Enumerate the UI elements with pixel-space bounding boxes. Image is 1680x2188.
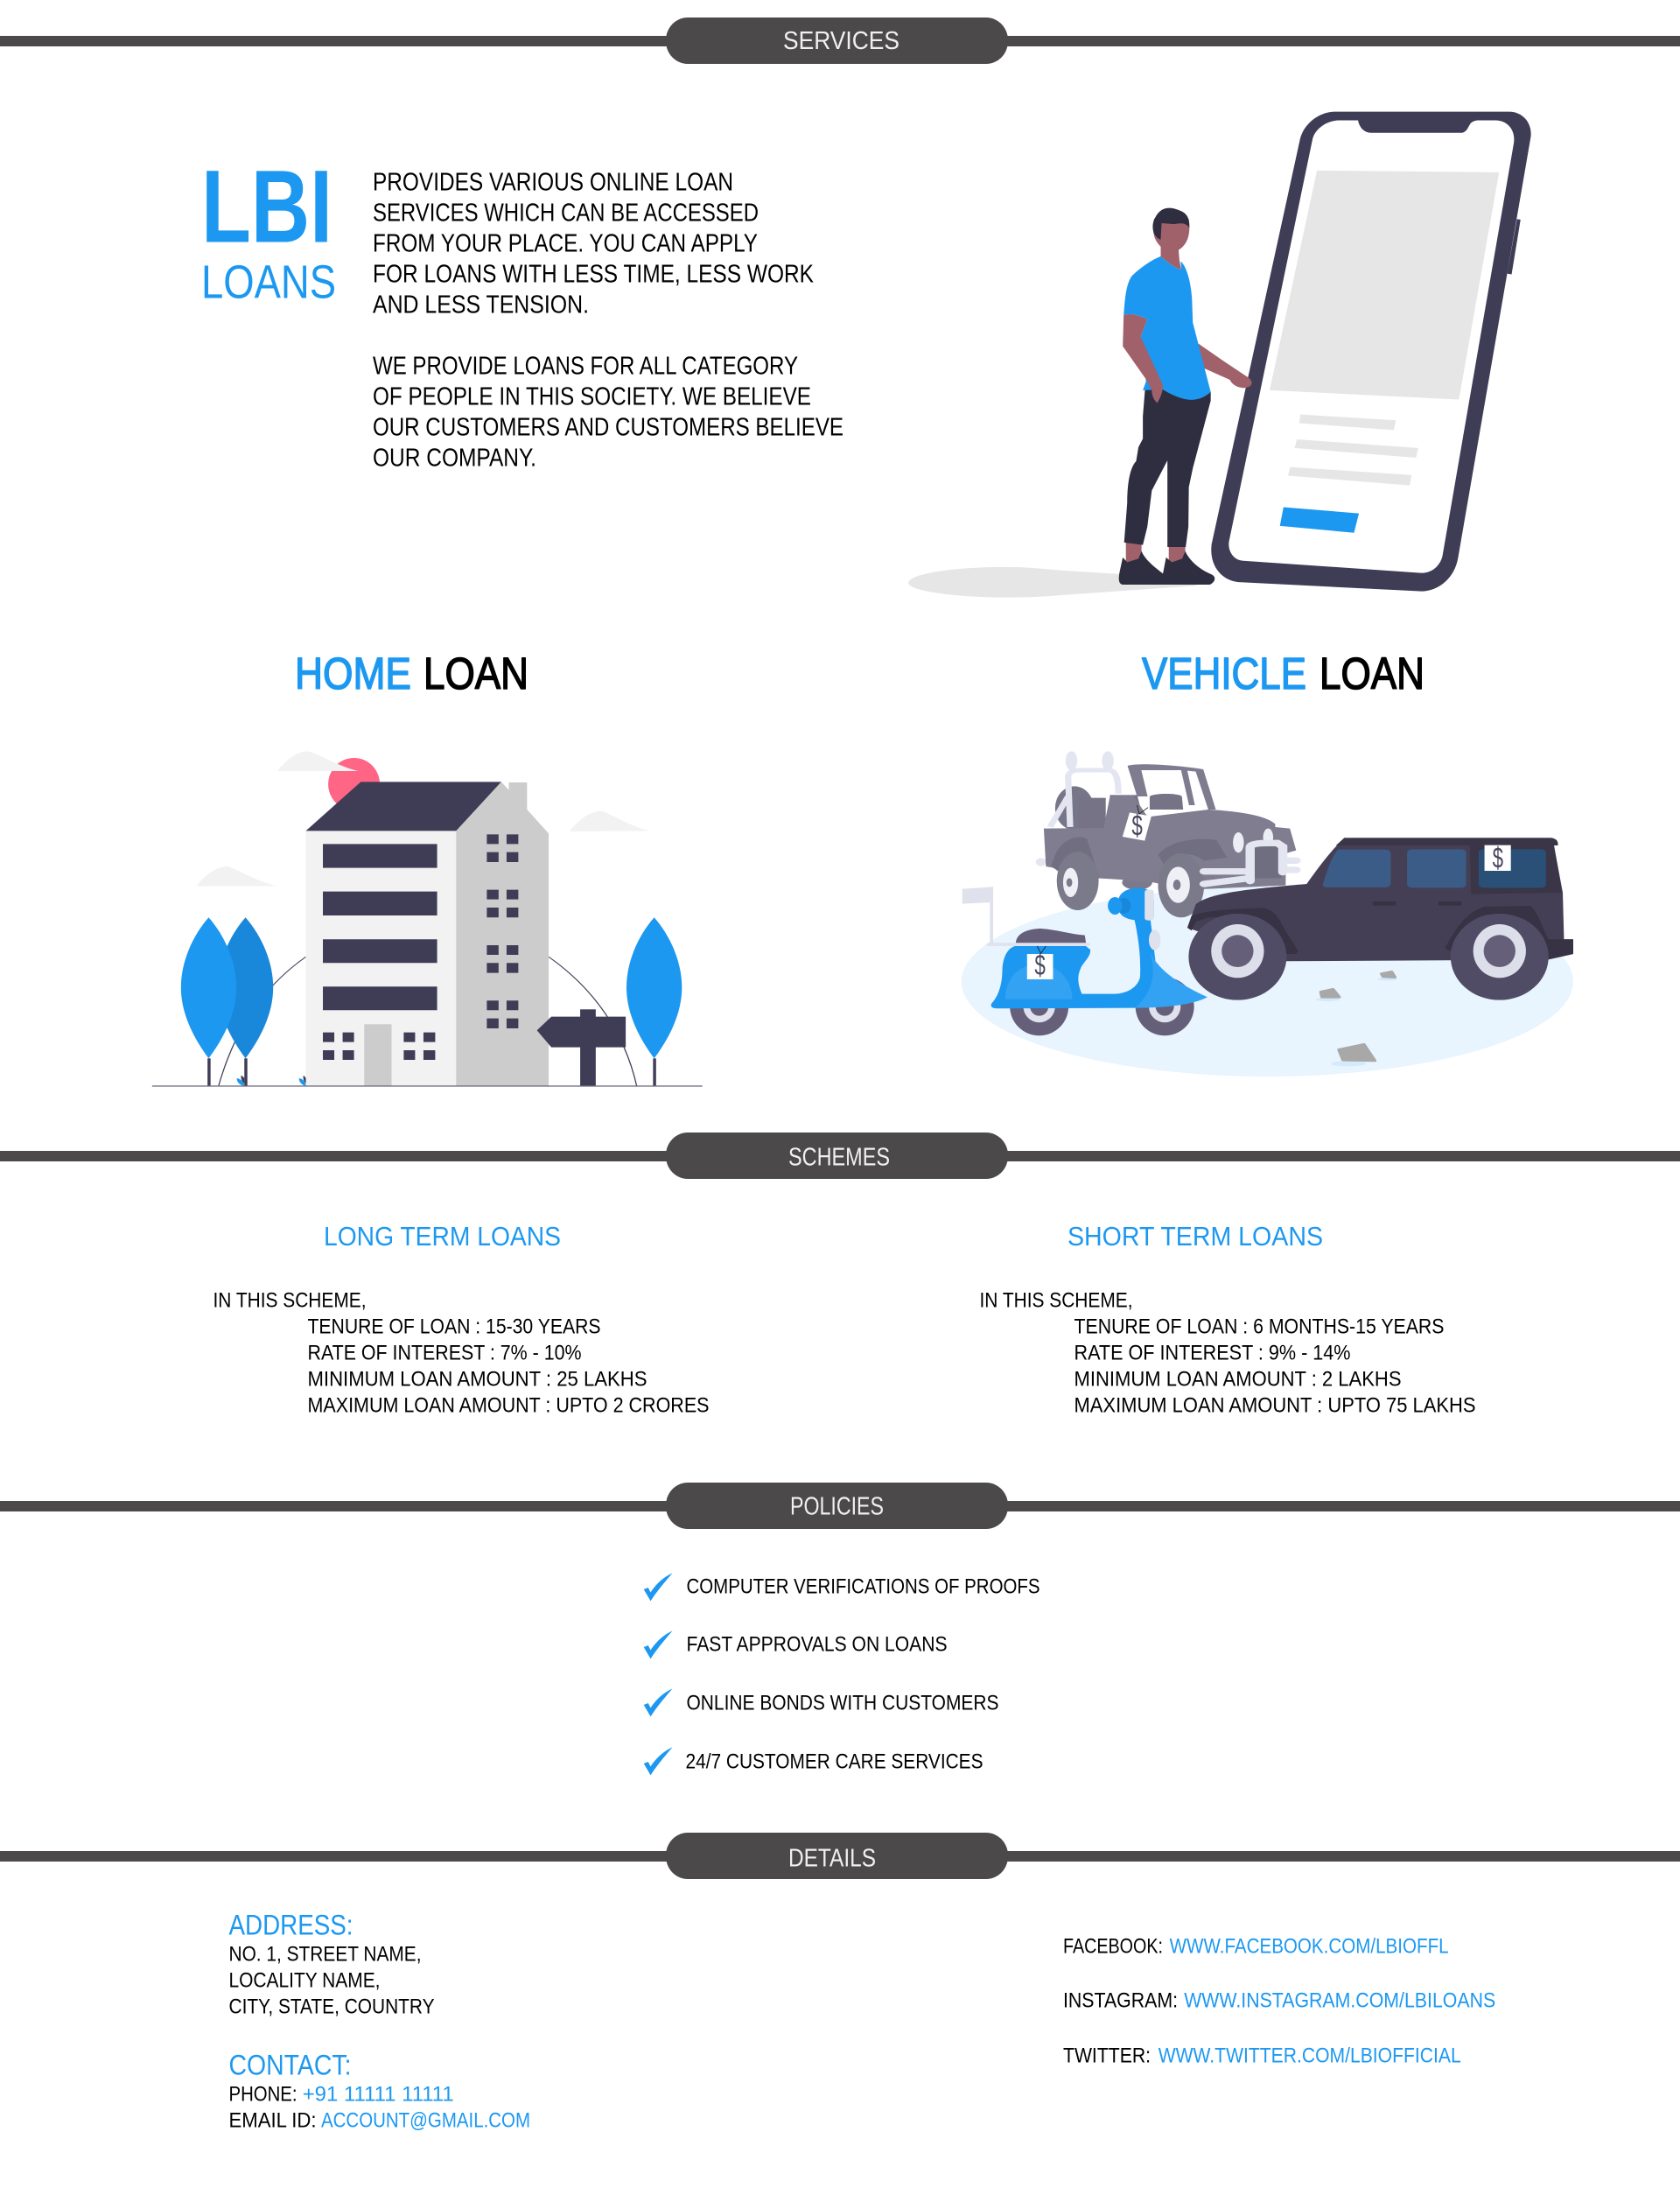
text block: address: LOCALITY NAME, xyxy=(229,1969,380,1993)
text block: short term loans: SHORT TERM LOANS xyxy=(1068,1221,1323,1252)
section header: policies xyxy=(0,1483,1680,1529)
icon: check mark 2 xyxy=(644,1630,673,1659)
list: policies checklist xyxy=(644,1573,1040,1775)
text block: company introduction xyxy=(373,169,844,473)
text block: long term loans: RATE OF INTEREST : 7% - 10% xyxy=(308,1341,581,1364)
illustration: apartment building with trees xyxy=(152,751,703,1087)
section header: details xyxy=(0,1833,1680,1879)
text block: contact: ACCOUNT@GMAIL.COM xyxy=(321,2109,530,2133)
text block: long term loans xyxy=(214,1221,709,1417)
illustration: vehicles for sale: $ xyxy=(1493,842,1503,874)
text block: company introduction: AND LESS TENSION. xyxy=(373,291,589,319)
heading: home loan: HOME xyxy=(295,649,411,698)
section header: services: SERVICES xyxy=(783,27,900,55)
text block: social links: WWW.TWITTER.COM/LBIOFFICIAL xyxy=(1158,2044,1461,2068)
text block: long term loans: MINIMUM LOAN AMOUNT : 25 LAKHS xyxy=(308,1367,648,1391)
text block: long term loans: MAXIMUM LOAN AMOUNT : UPTO 2 CRORES xyxy=(308,1393,709,1417)
text block: company introduction: OF PEOPLE IN THIS SOCIETY. WE BELIEVE xyxy=(373,383,811,411)
text block: address: CITY, STATE, COUNTRY xyxy=(229,1995,434,2019)
text block: address: ADDRESS: xyxy=(229,1910,354,1941)
text block: social links: INSTAGRAM: xyxy=(1063,1989,1178,2013)
text block: contact: EMAIL ID: xyxy=(229,2109,317,2133)
policy item 3: ONLINE BONDS WITH CUSTOMERS xyxy=(686,1691,999,1715)
text block: company introduction: OUR COMPANY. xyxy=(373,445,536,473)
text block: contact: +91 11111 11111 xyxy=(303,2083,454,2107)
text block: company introduction: WE PROVIDE LOANS FOR ALL CATEGORY xyxy=(373,353,798,381)
policy item 2: FAST APPROVALS ON LOANS xyxy=(686,1633,947,1657)
icon: check mark 1 xyxy=(644,1573,673,1601)
text block: short term loans xyxy=(980,1221,1475,1417)
icon: check mark 3 xyxy=(644,1688,673,1716)
heading: vehicle loan xyxy=(1142,649,1424,698)
heading: vehicle loan: LOAN xyxy=(1320,649,1424,698)
illustration: vehicles for sale: $ xyxy=(1034,949,1046,981)
illustration: vehicles for sale: $ xyxy=(1131,810,1143,842)
section header: schemes xyxy=(0,1133,1680,1179)
logo: LBI Loans xyxy=(201,149,336,308)
illustration: vehicles for sale xyxy=(962,751,1573,1076)
text block: short term loans: IN THIS SCHEME, xyxy=(980,1288,1132,1312)
icon: check mark 4 xyxy=(644,1747,673,1775)
text block: long term loans: TENURE OF LOAN : 15-30 YEARS xyxy=(308,1315,600,1338)
section header: schemes: SCHEMES xyxy=(788,1143,890,1171)
text block: contact: CONTACT: xyxy=(229,2050,352,2081)
text block: social links: FACEBOOK: xyxy=(1063,1934,1163,1958)
text block: company introduction: SERVICES WHICH CAN BE ACCESSED xyxy=(373,200,759,228)
text block: social links xyxy=(1063,1934,1495,2068)
logo: LBI Loans: LOANS xyxy=(201,256,336,308)
text block: long term loans: LONG TERM LOANS xyxy=(324,1221,561,1252)
illustration: person beside large smartphone xyxy=(908,112,1531,598)
section header: policies: POLICIES xyxy=(790,1493,884,1521)
text block: short term loans: TENURE OF LOAN : 6 MONTHS-15 YEARS xyxy=(1074,1315,1444,1338)
section header: services xyxy=(0,18,1680,64)
text block: long term loans: IN THIS SCHEME, xyxy=(214,1288,366,1312)
heading: home loan xyxy=(295,649,528,698)
policy item 4: 24/7 CUSTOMER CARE SERVICES xyxy=(686,1750,984,1774)
heading: vehicle loan: VEHICLE xyxy=(1142,649,1306,698)
text block: company introduction: PROVIDES VARIOUS ONLINE LOAN xyxy=(373,169,733,197)
text block: company introduction: OUR CUSTOMERS AND CUSTOMERS BELIEVE xyxy=(373,414,844,442)
text block: short term loans: MINIMUM LOAN AMOUNT : 2 LAKHS xyxy=(1074,1367,1402,1391)
text block: company introduction: FROM YOUR PLACE. YOU CAN APPLY xyxy=(373,230,758,258)
text block: short term loans: RATE OF INTEREST : 9% - 14% xyxy=(1074,1341,1351,1364)
policy item 1: COMPUTER VERIFICATIONS OF PROOFS xyxy=(686,1575,1040,1599)
text block: short term loans: MAXIMUM LOAN AMOUNT : UPTO 75 LAKHS xyxy=(1074,1393,1475,1417)
text block: address: NO. 1, STREET NAME, xyxy=(229,1943,422,1967)
text block: contact: PHONE: xyxy=(229,2083,298,2107)
text block: social links: WWW.FACEBOOK.COM/LBIOFFL xyxy=(1170,1934,1449,1958)
section header: details: DETAILS xyxy=(788,1845,876,1873)
text block: company introduction: FOR LOANS WITH LESS TIME, LESS WORK xyxy=(373,261,814,289)
text block: social links: TWITTER: xyxy=(1063,2044,1151,2068)
text block: address xyxy=(229,1910,434,2019)
heading: home loan: LOAN xyxy=(424,649,528,698)
logo: LBI Loans: LBI xyxy=(201,149,332,264)
text block: social links: WWW.INSTAGRAM.COM/LBILOANS xyxy=(1184,1989,1495,2013)
text block: contact xyxy=(229,2050,530,2133)
